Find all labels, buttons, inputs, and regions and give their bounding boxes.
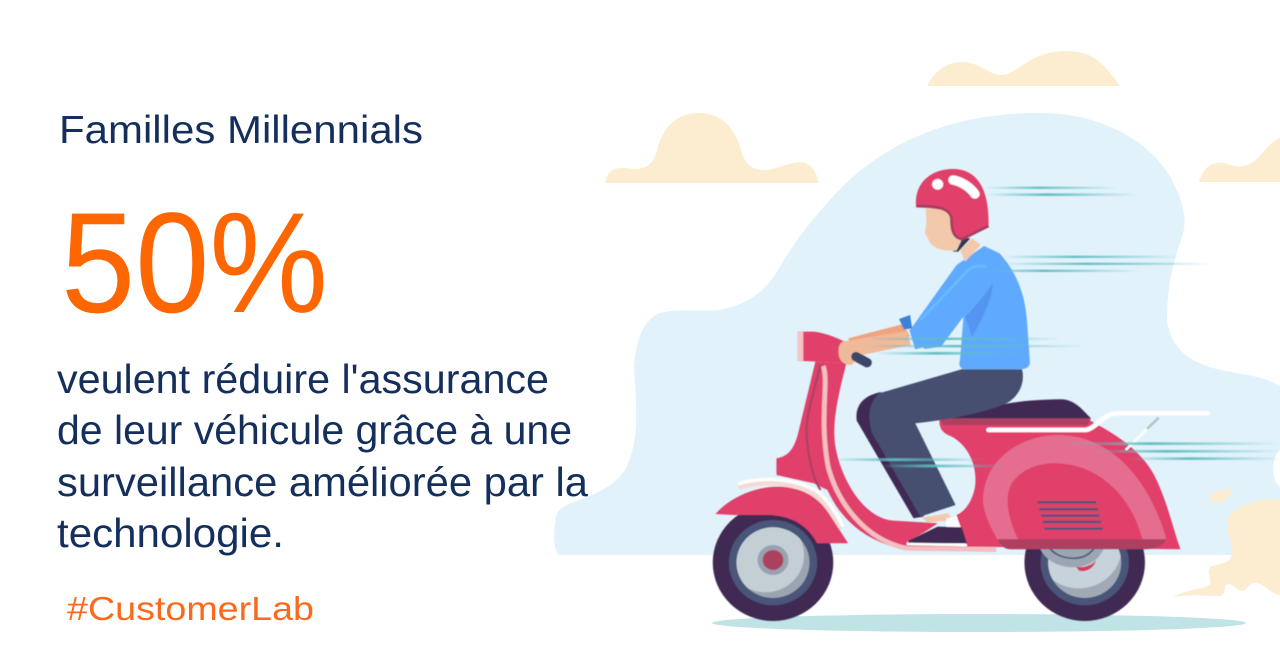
hand and handlebar <box>797 331 911 365</box>
rear wheel <box>1024 548 1146 622</box>
luggage rack <box>989 413 1207 449</box>
illustration: rider on red scooter <box>713 169 1280 621</box>
cloud: top centre <box>927 51 1120 86</box>
cloud: left <box>606 113 818 183</box>
trousers <box>856 369 1023 518</box>
vent grille <box>1038 502 1103 529</box>
body text: veulent réduire l'assurance <box>57 356 549 402</box>
hashtag: #CustomerLab <box>67 590 314 627</box>
shirt <box>899 246 1030 369</box>
body text: de leur véhicule grâce à une <box>57 407 572 453</box>
speed lines <box>831 187 1280 467</box>
front fender <box>715 480 848 543</box>
cloud: bottom right <box>1173 489 1280 597</box>
headline statistic: 50% <box>61 184 328 343</box>
cloud: right <box>1199 138 1280 182</box>
body text: technologie. <box>57 510 284 556</box>
far arm <box>848 324 910 347</box>
body text <box>57 356 588 556</box>
front wheel <box>713 504 833 621</box>
head and helmet <box>916 169 989 262</box>
seat <box>939 399 1091 425</box>
ground shadow <box>712 614 1246 632</box>
front shield <box>776 362 996 550</box>
rear body <box>939 420 1180 549</box>
engine cover <box>1038 540 1106 571</box>
shoe <box>907 513 967 547</box>
body text: surveillance améliorée par la <box>57 459 588 505</box>
segment label: Familles Millennials <box>59 109 423 152</box>
background blob <box>554 113 1280 555</box>
